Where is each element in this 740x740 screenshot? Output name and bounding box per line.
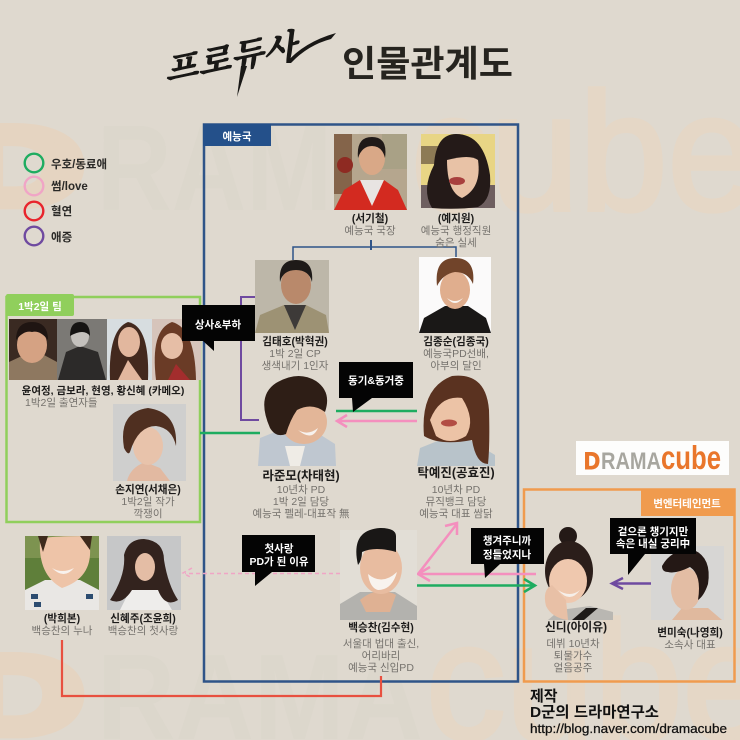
legend: 썸/love <box>51 179 88 193</box>
text: 손지연: 깍쟁이 <box>134 508 162 520</box>
text: 손지연: 손지연(서채은) <box>115 483 181 496</box>
text: 라준모: 1박 2일 담당 <box>273 495 329 508</box>
text: 김종순 <box>423 336 489 372</box>
connector: purple rivalry bracket <box>241 297 259 420</box>
photo: 백승찬 <box>340 528 417 620</box>
text: 박희본 <box>32 612 93 637</box>
callout: first love: 첫사랑 <box>265 542 294 555</box>
photo: 김태호 <box>255 260 329 333</box>
photo: 신혜주 <box>107 536 181 610</box>
legend: 우호/동료애 <box>51 158 107 171</box>
photo: 손지연 <box>113 404 186 481</box>
photo: 변미숙 <box>651 546 724 620</box>
text: 탁예진: 탁예진(공효진) <box>417 466 495 480</box>
logo: DRAMAcube: cube <box>661 439 721 476</box>
photo: 탁예진 <box>417 376 495 466</box>
text: 1N2D cast: 윤여정, 금보라, 현영, 황신혜 (카메오) <box>22 384 184 397</box>
panel: variety bureau <box>203 124 518 682</box>
connector: team friendship line <box>200 432 260 434</box>
credits: http://blog.naver.com/dramacube <box>530 722 727 736</box>
logo: DRAMAcube: D <box>584 448 600 475</box>
photo: 서기철 <box>334 134 407 210</box>
panel: 1N2D team: 1박2일 팀 <box>18 300 62 313</box>
arrow: green to Cindy <box>417 579 535 592</box>
text: 신디: 퇴물가수 <box>554 650 593 662</box>
photo: 예지원 <box>421 134 495 209</box>
text: 탁예진: 뮤직뱅크 담당 <box>426 496 487 508</box>
callout: got attached: 챙겨주니까 <box>483 534 531 547</box>
watermark: bottom <box>0 587 740 740</box>
text: 김종순: 김종순(김종국) <box>423 336 489 348</box>
text: 서기철 <box>344 212 396 237</box>
photo: 박희본 <box>25 536 99 610</box>
text: 김종순: 예능국PD선배, <box>423 347 489 360</box>
text: 김종순: 아부의 달인 <box>430 360 482 372</box>
text: 신혜주 <box>108 612 179 637</box>
text: 1N2D cast: 1박2일 출연자들 <box>25 396 98 409</box>
text: 신혜주: 백승찬의 첫사랑 <box>108 625 179 637</box>
photo: 김종국 <box>419 257 491 333</box>
connector: red family line <box>62 640 381 696</box>
text: 백승찬: 서울대 법대 출신, <box>343 638 419 650</box>
panel: entertainment company <box>524 489 735 682</box>
text: 라준모 <box>252 468 350 520</box>
title: relationship chart: 인물관계도 <box>342 43 513 84</box>
text: 라준모: 라준모(차태현) <box>262 468 340 483</box>
text: 탁예진: 예능국 대표 쌈닭 <box>419 507 493 520</box>
arrow: pink love to 라준모 <box>337 415 417 427</box>
callout: got attached <box>471 528 544 578</box>
text: 예지원 <box>421 212 491 249</box>
arrow: pink from Cindy <box>418 567 536 581</box>
text: 1N2D cast <box>22 384 184 409</box>
credits: D군의 드라마연구소 <box>530 704 659 721</box>
photos: 1N2D cast <box>9 319 201 380</box>
text: 변미숙: 소속사 대표 <box>664 639 716 651</box>
text: 신디 <box>545 620 607 674</box>
text: 서기철: (서기철) <box>352 212 388 225</box>
callout: colleagues and housemates <box>339 362 413 412</box>
text: 백승찬: 예능국 신입PD <box>348 661 414 674</box>
text: 백승찬: 어리바리 <box>362 650 400 662</box>
text: 변미숙: 변미숙(나영희) <box>657 626 723 639</box>
text: 박희본: (박희본) <box>44 612 80 625</box>
connector: boss to staff <box>293 240 456 260</box>
photo: 신디 <box>545 527 613 620</box>
text: 백승찬: 백승찬(김수현) <box>348 621 414 634</box>
arrow: purple to Cindy <box>612 578 651 589</box>
photo: 라준모 <box>258 376 336 466</box>
text: 예지원: 예능국 행정직원 <box>421 224 491 237</box>
arrow: pink dashed first love <box>183 568 340 578</box>
callout: boss and staff: 상사&부하 <box>195 318 241 331</box>
panel: entertainment company: 변엔터테인먼트 <box>653 497 721 510</box>
text: 김태호: 1박 2일 CP <box>269 347 321 360</box>
legend: 애증 <box>51 231 73 244</box>
callout: boss and staff <box>182 305 255 351</box>
legend: 혈연 <box>51 204 72 218</box>
text: 손지연 <box>115 483 181 520</box>
credits: 제작 <box>530 688 558 705</box>
arrow: pink up to 탁예진 <box>418 523 457 574</box>
logo: DRAMAcube: RAMA <box>601 448 661 475</box>
text: 손지연: 1박2일 작가 <box>121 495 175 508</box>
text: 김태호 <box>262 335 329 372</box>
connector: colleagues green <box>336 410 417 412</box>
callout: inner plotting <box>610 518 696 575</box>
text: 예지원: 숨은 실세 <box>435 237 477 249</box>
text: 예지원: (예지원) <box>438 212 474 225</box>
watermark: top <box>0 58 740 246</box>
callout: inner plotting: 속은 내실 궁리中 <box>616 537 690 550</box>
text: 라준모: 10년차 PD <box>277 484 326 496</box>
text: 신디: 신디(아이유) <box>545 620 607 634</box>
watermark: top: RAMA <box>97 100 407 236</box>
text: 신디: 얼음공주 <box>554 662 593 674</box>
legend <box>25 154 107 245</box>
text: 김태호: 김태호(박혁권) <box>262 335 328 348</box>
text: 박희본: 백승찬의 누나 <box>32 625 93 637</box>
text: 김태호: 생색내기 1인자 <box>262 360 329 372</box>
logo: DRAMAcube <box>576 439 729 476</box>
panel: 1N2D team <box>6 294 200 522</box>
credits <box>530 688 727 736</box>
text: 탁예진 <box>417 466 495 520</box>
text: 서기철: 예능국 국장 <box>344 224 396 237</box>
callout: first love: PD가 된 이유 <box>249 555 309 568</box>
callout: got attached: 정들었지나 <box>483 548 531 561</box>
text: 신혜주: 신혜주(조윤희) <box>110 612 176 625</box>
callout: inner plotting: 겉으론 챙기지만 <box>618 525 689 538</box>
title: drama logotype: 프로듀사 <box>165 17 303 92</box>
text: 백승찬 <box>343 621 419 674</box>
panel: variety bureau: 예능국 <box>223 130 252 143</box>
text: 신디: 데뷔 10년차 <box>546 638 600 650</box>
callout: first love <box>242 535 315 586</box>
callout: colleagues and housemates: 동기&동거중 <box>348 374 404 387</box>
text: 라준모: 예능국 펠레-대표작 無 <box>252 507 350 520</box>
text: 변미숙 <box>657 626 723 651</box>
text: 탁예진: 10년차 PD <box>432 484 481 496</box>
